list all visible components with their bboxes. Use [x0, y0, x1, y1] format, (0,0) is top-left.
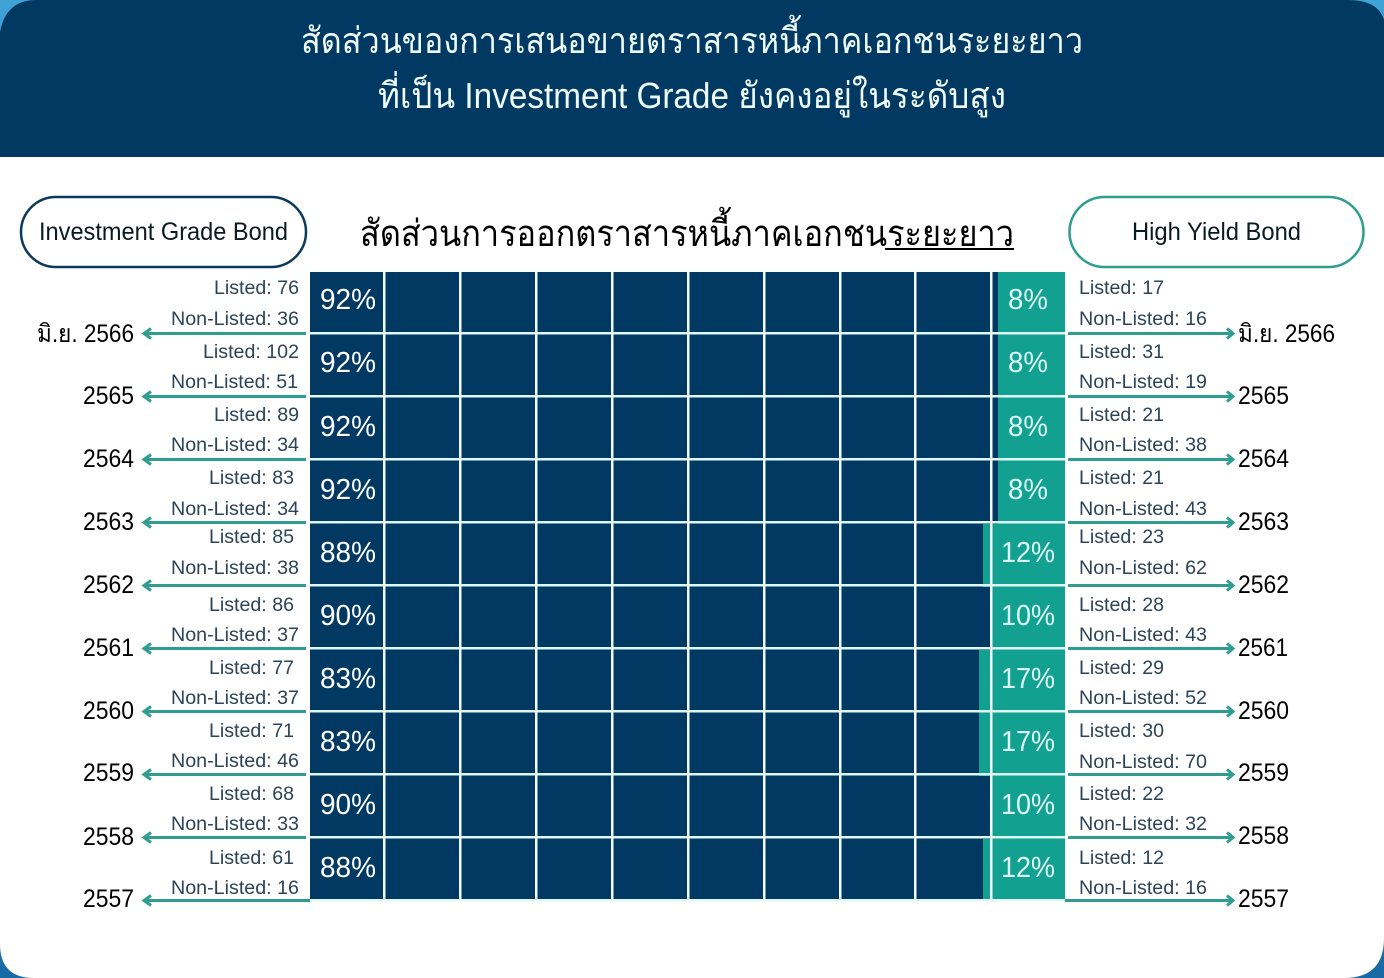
left: 2565: 2565 — [83, 382, 134, 410]
row: 2559: 83% — [320, 726, 376, 758]
left: 2563: Non-Listed: 34 — [171, 498, 299, 520]
right: June 2566 — [1068, 277, 1335, 348]
pill: Investment Grade Bond — [21, 197, 306, 267]
right: 2559: 2559 — [1238, 759, 1289, 787]
row: 2564 — [310, 398, 1065, 461]
right: 2563: Listed: 21 — [1079, 467, 1164, 489]
left: 2558: 2558 — [83, 823, 134, 851]
left: 2559 — [83, 720, 306, 787]
right: 2561: 2561 — [1238, 634, 1288, 662]
left: 2565: Non-Listed: 51 — [171, 371, 298, 393]
left: 2564: 2564 — [83, 445, 134, 473]
left: 2560: Non-Listed: 37 — [171, 687, 299, 709]
row: 2557 — [310, 839, 1065, 899]
row: 2565 — [310, 335, 1065, 398]
left: 2561: Listed: 86 — [209, 594, 294, 616]
right: 2563: 2563 — [1238, 508, 1289, 536]
row: 2558 — [310, 776, 1065, 839]
right: 2561: Non-Listed: 43 — [1079, 624, 1207, 646]
row: 2562: 12% — [1001, 537, 1055, 569]
left: 2563 — [83, 467, 306, 536]
right: 2562 — [1068, 526, 1289, 599]
right: 2562: 2562 — [1238, 571, 1289, 599]
pill: High Yield Bond: High Yield Bond — [1132, 218, 1301, 246]
right: 2561: Listed: 28 — [1079, 594, 1164, 616]
left: 2557: Listed: 61 — [209, 847, 294, 869]
stacked share chart — [310, 272, 1065, 899]
right: 2560: Listed: 29 — [1079, 657, 1164, 679]
right: 2559: Listed: 30 — [1079, 720, 1164, 742]
left: 2558: Non-Listed: 33 — [171, 813, 299, 835]
right labels: High Yield Bond issuers by year — [1065, 277, 1335, 913]
right: 2563: Non-Listed: 43 — [1079, 498, 1207, 520]
right: 2560: 2560 — [1238, 697, 1289, 725]
left labels: Investment Grade Bond issuers by year — [37, 277, 310, 913]
row: 2558: 90% — [320, 789, 376, 821]
right: June 2566: Listed: 17 — [1079, 277, 1164, 299]
row: 2560 — [310, 650, 1065, 713]
left: June 2566 — [37, 277, 306, 348]
right: 2559: Non-Listed: 70 — [1079, 751, 1207, 773]
row: 2557: 12% — [1001, 852, 1055, 884]
left: 2562 — [83, 526, 306, 599]
right: 2560 — [1068, 657, 1289, 725]
chart heading: สัดส่วนการออกตราสารหนี้ภาคเอกชนระยะยาว — [360, 206, 1014, 254]
row: June 2566: 8% — [1008, 284, 1048, 316]
right: 2565: Listed: 31 — [1079, 341, 1164, 363]
row: 2559 — [310, 713, 1065, 776]
row: 2562 — [310, 524, 1065, 587]
title — [301, 14, 1083, 118]
left: 2558 — [83, 783, 306, 851]
left: 2559: 2559 — [83, 759, 134, 787]
left: 2563: 2563 — [83, 508, 134, 536]
left: 2561 — [83, 594, 306, 662]
left: 2557: 2557 — [83, 885, 134, 913]
row: 2560: 83% — [320, 663, 376, 695]
row: June 2566: 92% — [320, 284, 376, 316]
left: 2562: Non-Listed: 38 — [171, 557, 299, 579]
right: 2557: 2557 — [1238, 885, 1289, 913]
title: สัดส่วนของการเสนอขายตราสารหนี้ภาคเอกชนระยะยาว — [301, 14, 1083, 61]
left: 2560: 2560 — [83, 697, 134, 725]
left: 2565 — [83, 341, 306, 410]
left: 2558: Listed: 68 — [209, 783, 294, 805]
right: 2564: 2564 — [1238, 445, 1289, 473]
row: 2561 — [310, 587, 1065, 650]
row: 2563: 92% — [320, 474, 376, 506]
right: 2565 — [1068, 341, 1289, 410]
right: 2564: Non-Listed: 38 — [1079, 434, 1207, 456]
left: 2562: 2562 — [83, 571, 134, 599]
left: 2559: Listed: 71 — [209, 720, 294, 742]
right: June 2566: Non-Listed: 16 — [1079, 308, 1207, 330]
row: 2561: 10% — [1001, 600, 1055, 632]
left: 2560 — [83, 657, 306, 725]
left: 2560: Listed: 77 — [209, 657, 294, 679]
title: ที่เป็น Investment Grade ยังคงอยู่ในระดับสูง — [378, 71, 1006, 118]
left: 2563: Listed: 83 — [209, 467, 294, 489]
row: 2561: 90% — [320, 600, 376, 632]
pill: Investment Grade Bond: Investment Grade Bond — [39, 218, 288, 246]
right: 2558 — [1068, 783, 1289, 850]
row: 2564: 8% — [1008, 411, 1048, 443]
right: 2557: Non-Listed: 16 — [1079, 877, 1207, 899]
right: 2558: 2558 — [1238, 822, 1289, 850]
row: 2563 — [310, 461, 1065, 524]
row: 2563: 8% — [1008, 474, 1048, 506]
left: 2561: Non-Listed: 37 — [171, 624, 299, 646]
pill: High Yield Bond — [1070, 197, 1364, 267]
right: 2557: Listed: 12 — [1079, 847, 1164, 869]
right: 2558: Listed: 22 — [1079, 783, 1164, 805]
left: 2564: Listed: 89 — [214, 404, 299, 426]
header band — [0, 0, 1384, 157]
left: June 2566: มิ.ย. 2566 — [37, 320, 134, 348]
row: 2562: 88% — [320, 537, 376, 569]
right: 2562: Non-Listed: 62 — [1079, 557, 1207, 579]
right: 2565: Non-Listed: 19 — [1079, 371, 1207, 393]
right: 2564 — [1068, 404, 1289, 473]
left: 2557: Non-Listed: 16 — [171, 877, 299, 899]
left: June 2566: Non-Listed: 36 — [171, 308, 299, 330]
right: 2562: Listed: 23 — [1079, 526, 1164, 548]
right: June 2566: มิ.ย. 2566 — [1238, 320, 1335, 348]
left: 2562: Listed: 85 — [209, 526, 294, 548]
right: 2565: 2565 — [1238, 382, 1289, 410]
row: 2558: 10% — [1001, 789, 1055, 821]
row: June 2566 — [310, 272, 1065, 335]
right: 2557 — [1065, 847, 1289, 913]
right: 2558: Non-Listed: 32 — [1079, 813, 1207, 835]
right: 2564: Listed: 21 — [1079, 404, 1164, 426]
left: 2565: Listed: 102 — [203, 341, 299, 363]
left: 2564: Non-Listed: 34 — [171, 434, 299, 456]
right: 2560: Non-Listed: 52 — [1079, 687, 1207, 709]
left: 2557 — [83, 847, 310, 913]
right: 2563 — [1068, 467, 1289, 536]
left: 2564 — [83, 404, 306, 473]
right: 2561 — [1068, 594, 1288, 662]
row: 2560: 17% — [1001, 663, 1055, 695]
row: 2564: 92% — [320, 411, 376, 443]
left: June 2566: Listed: 76 — [214, 277, 299, 299]
left: 2559: Non-Listed: 46 — [171, 750, 299, 772]
left: 2561: 2561 — [83, 634, 134, 662]
right: 2559 — [1068, 720, 1289, 787]
row: 2557: 88% — [320, 852, 376, 884]
row: 2559: 17% — [1001, 726, 1055, 758]
row: 2565: 8% — [1008, 347, 1048, 379]
row: 2565: 92% — [320, 347, 376, 379]
